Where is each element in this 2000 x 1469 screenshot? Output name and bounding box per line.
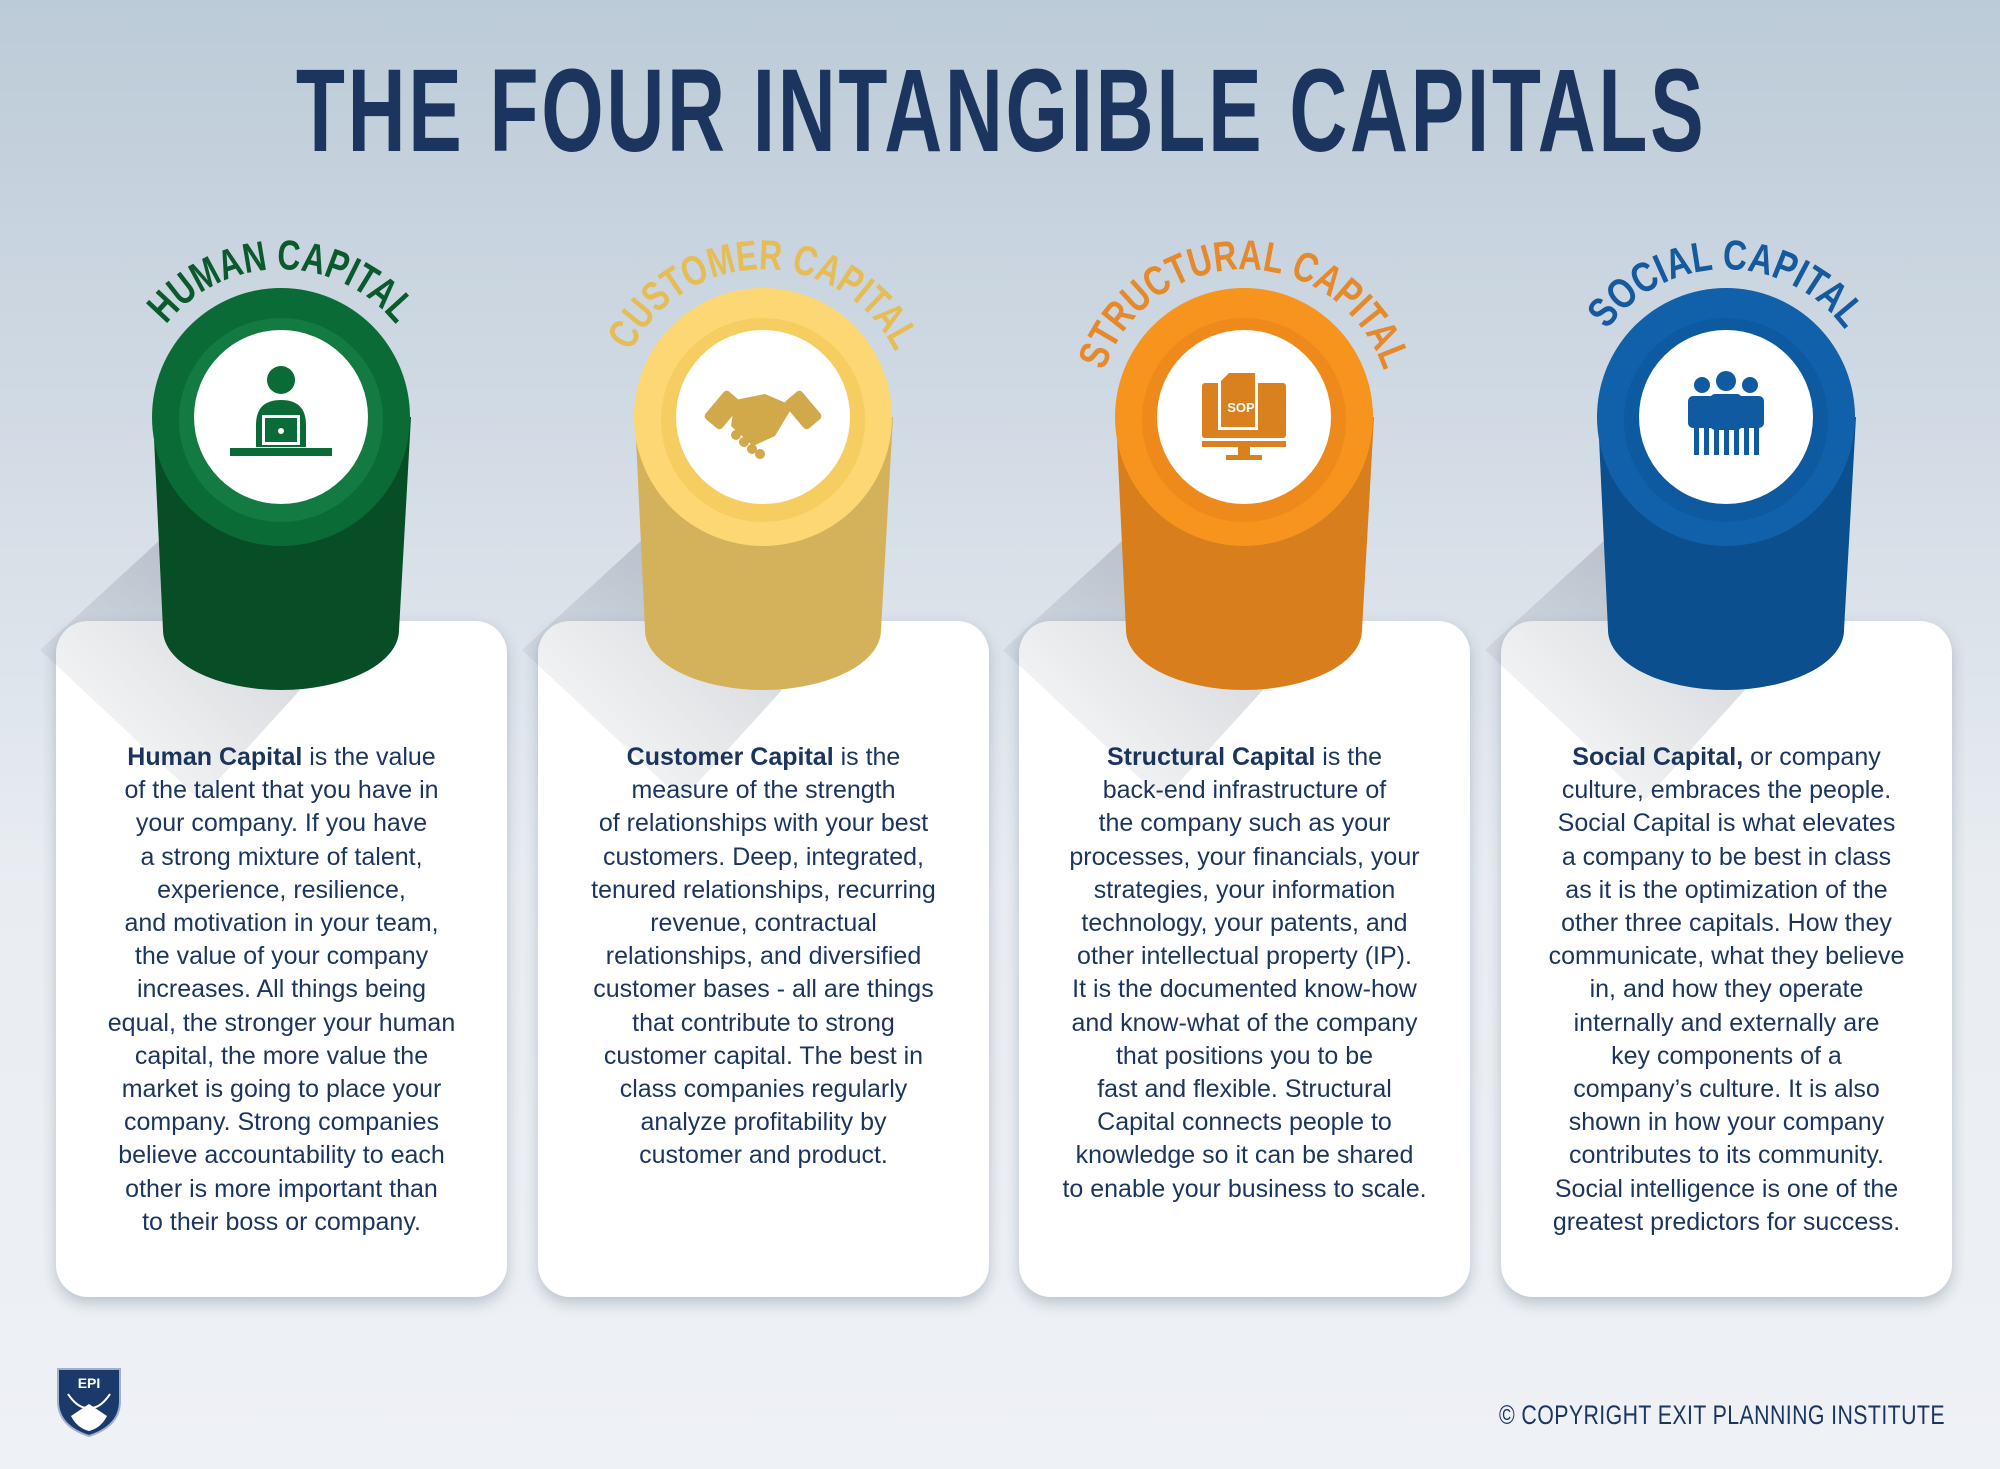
label: customer capital: CUSTOMER CAPITAL [610, 240, 914, 351]
cylinder: structural [1004, 240, 1406, 800]
icon: people group [1688, 371, 1764, 455]
icon: person at laptop [230, 366, 332, 456]
text: structural capital: It is the documented know-how [1072, 975, 1417, 1003]
cylinder: customer [522, 240, 914, 800]
text: human capital: equal, the stronger your human [108, 1009, 455, 1037]
text: social capital: Social Capital, or company [1572, 743, 1881, 771]
card: human capital [56, 621, 507, 1297]
text: structural capital: the company such as your [1099, 809, 1390, 837]
text: structural capital: fast and flexible. Structural [1097, 1075, 1392, 1103]
text: customer capital: analyze profitability by [641, 1108, 886, 1136]
text: human capital: the value of your company [135, 942, 428, 970]
icon: SOP monitor [1202, 370, 1286, 460]
text: social capital: shown in how your company [1569, 1108, 1884, 1136]
text: customer capital: customer bases - all are things [593, 975, 934, 1003]
text: human capital: other is more important than [125, 1175, 438, 1203]
text: structural capital: Capital connects people to [1097, 1108, 1392, 1136]
text: social capital: a company to be best in class [1562, 843, 1891, 871]
label: structural capital: STRUCTURAL CAPITAL [1080, 240, 1406, 370]
text: structural capital: technology, your patents, and [1081, 909, 1408, 937]
text: social capital: communicate, what they believe [1549, 942, 1904, 970]
text: social capital: Social intelligence is one of the [1555, 1175, 1898, 1203]
text: social capital: greatest predictors for success. [1553, 1208, 1900, 1236]
text: human capital: experience, resilience, [157, 876, 406, 904]
text: structural capital: other intellectual property (IP). [1077, 942, 1412, 970]
text: customer capital: customers. Deep, integrated, [603, 843, 924, 871]
text: structural capital: knowledge so it can be shared [1076, 1141, 1413, 1169]
text: human capital: your company. If you have [136, 809, 427, 837]
text: human capital: to their boss or company. [142, 1208, 421, 1236]
label: social capital: SOCIAL CAPITAL [1588, 240, 1859, 329]
icon: handshake [703, 389, 823, 459]
text: customer capital: that contribute to strong [632, 1009, 895, 1037]
text: human capital: and motivation in your team, [124, 909, 439, 937]
text: customer capital: relationships, and diversified [606, 942, 921, 970]
copyright: © COPYRIGHT EXIT PLANNING INSTITUTE [1499, 1400, 1945, 1430]
label: human capital: HUMAN CAPITAL [146, 240, 409, 324]
text: human capital: of the talent that you have in [124, 776, 439, 804]
text: structural capital: and know-what of the company [1071, 1009, 1418, 1037]
text: social capital: key components of a [1611, 1042, 1842, 1070]
title: THE FOUR INTANGIBLE CAPITALS [296, 45, 1706, 177]
text: customer capital: customer and product. [639, 1141, 888, 1169]
text: human capital [108, 743, 455, 1236]
text: structural capital: processes, your financials, your [1069, 843, 1420, 871]
text: customer capital: measure of the strength [631, 776, 896, 804]
text: social capital: Social Capital is what elevates [1558, 809, 1895, 837]
logo: EPI shield [57, 1368, 121, 1437]
text: structural capital [1062, 743, 1427, 1203]
text: social capital: other three capitals. How they [1561, 909, 1892, 937]
text: social capital: contributes to its community. [1569, 1141, 1884, 1169]
cylinder: social [1486, 240, 1859, 800]
cylinder: human [40, 240, 411, 800]
text: social capital: internally and externally are [1574, 1009, 1879, 1037]
text: structural capital: strategies, your information [1094, 876, 1395, 904]
text: social capital: as it is the optimization of the [1565, 876, 1888, 904]
text: customer capital: Customer Capital is the [627, 743, 900, 771]
card: customer capital [538, 621, 989, 1297]
icon: SOP monitor: SOP [1227, 400, 1255, 415]
text: customer capital: customer capital. The best in [604, 1042, 923, 1070]
text: customer capital: of relationships with your best [599, 809, 928, 837]
text: human capital: increases. All things being [137, 975, 426, 1003]
text: human capital: believe accountability to each [118, 1141, 445, 1169]
card: social capital [1501, 621, 1952, 1297]
card: structural capital [1019, 621, 1470, 1297]
logo: EPI shield: EPI [78, 1375, 100, 1391]
text: social capital: in, and how they operate [1590, 975, 1863, 1003]
text: human capital: Human Capital is the value [127, 743, 436, 771]
text: human capital: a strong mixture of talent, [140, 843, 423, 871]
text: customer capital [591, 743, 936, 1169]
text: structural capital: that positions you to be [1116, 1042, 1373, 1070]
text: structural capital: to enable your business to scale. [1062, 1175, 1427, 1203]
text: customer capital: tenured relationships, recurring [591, 876, 936, 904]
text: social capital [1549, 743, 1904, 1236]
text: structural capital: Structural Capital is the [1107, 743, 1382, 771]
text: human capital: capital, the more value the [135, 1042, 428, 1070]
text: social capital: culture, embraces the people. [1562, 776, 1891, 804]
text: social capital: company’s culture. It is also [1573, 1075, 1880, 1103]
text: human capital: market is going to place your [122, 1075, 441, 1103]
text: customer capital: revenue, contractual [650, 909, 877, 937]
text: customer capital: class companies regularly [620, 1075, 907, 1103]
text: human capital: company. Strong companies [124, 1108, 439, 1136]
text: structural capital: back-end infrastructure of [1103, 776, 1386, 804]
